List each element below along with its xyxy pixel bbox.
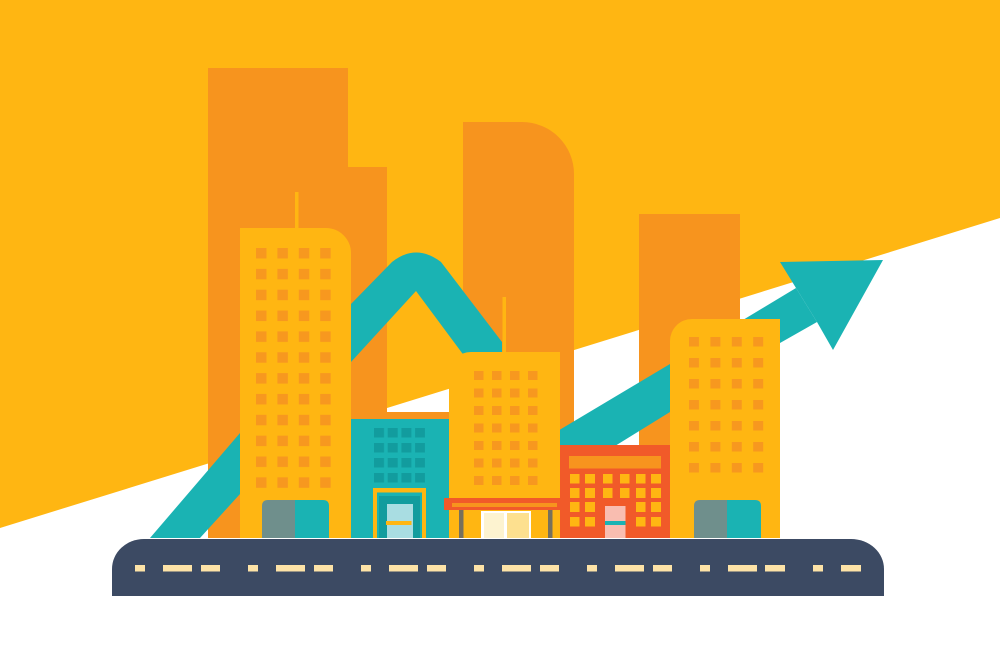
growth arrow: [150, 252, 883, 538]
body: [351, 419, 449, 538]
arrow: rising and falling line: [150, 252, 502, 538]
body: [560, 445, 670, 538]
back building: stepped orange tower: [208, 68, 387, 538]
entrance door: [262, 500, 329, 538]
windows: [256, 248, 331, 488]
back building: right orange tower: [639, 214, 740, 454]
background: yellow diagonal field: [0, 0, 1000, 528]
building: tower 4: [670, 319, 780, 538]
tower body: [670, 319, 780, 538]
back building: rounded orange tower: [463, 122, 574, 440]
sign band: [569, 456, 661, 468]
windows: [689, 337, 765, 474]
glass doors: [481, 511, 531, 538]
arrow: final rising shaft: [556, 288, 817, 446]
awning: [444, 498, 561, 510]
windows: [474, 371, 538, 486]
windows: [374, 428, 425, 483]
arrow: head: [780, 260, 883, 350]
road centre markings: [135, 565, 861, 572]
road: [112, 539, 884, 596]
awning posts: [459, 510, 552, 538]
antenna: [295, 192, 298, 230]
windows: [570, 474, 661, 526]
door with frame: [373, 488, 426, 538]
antenna: [502, 297, 506, 354]
roof band: [351, 412, 449, 420]
building: red office: [560, 445, 670, 538]
door: [605, 506, 626, 538]
building: teal shop: [351, 412, 449, 538]
tower body: [449, 352, 560, 538]
tower body: [240, 228, 351, 538]
entrance door: [694, 500, 761, 538]
building: tower 1: [240, 192, 351, 538]
building: tower 3: [444, 297, 561, 538]
road surface: [112, 539, 884, 596]
